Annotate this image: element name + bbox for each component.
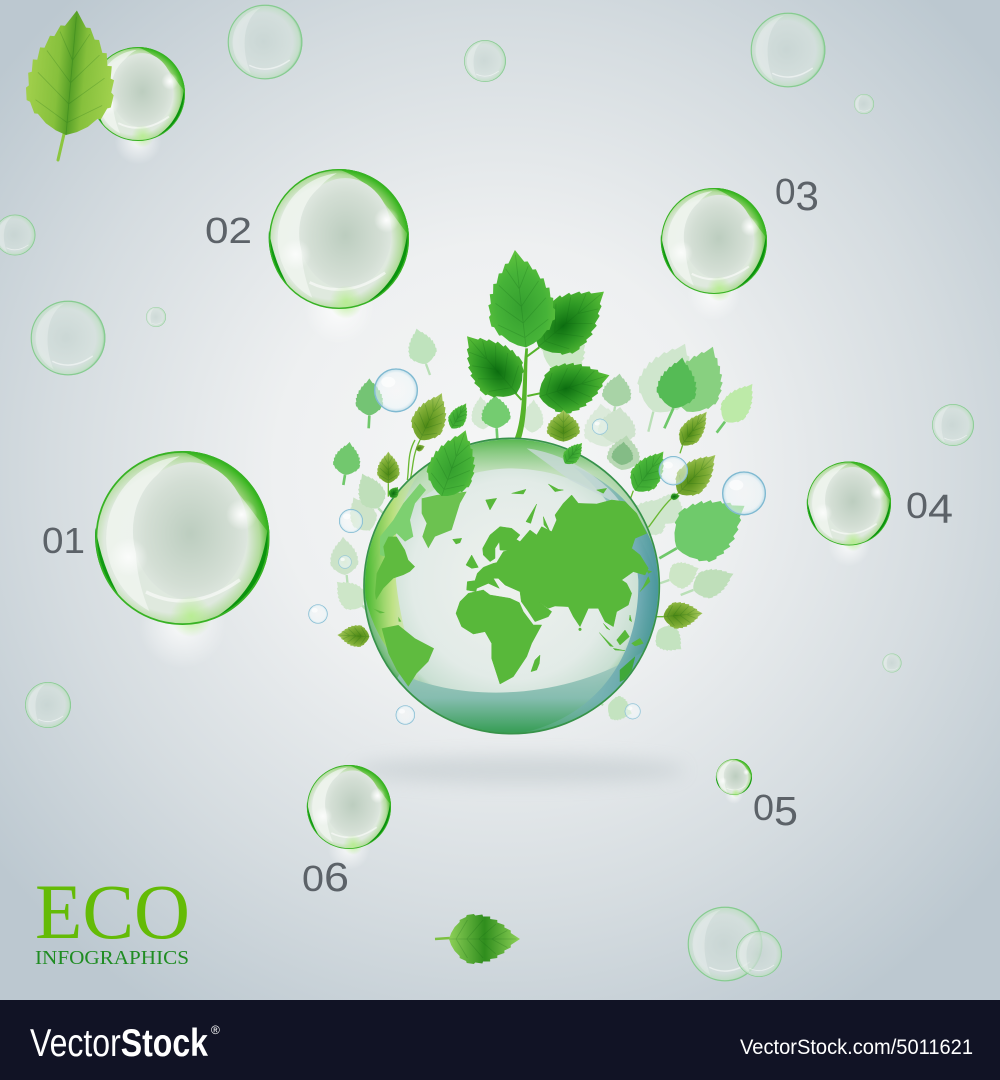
label 02: 02 [205, 210, 252, 251]
subtitle: INFOGRAPHICS: INFOGRAPHICS [35, 947, 189, 969]
glass globe [363, 438, 663, 737]
Madagascar [531, 655, 540, 672]
top-right light facet [527, 448, 619, 501]
Arctic Canada [380, 483, 426, 557]
North America [375, 537, 415, 600]
title: ECO: ECO [35, 868, 190, 955]
dark plant leaves [448, 246, 622, 442]
bubble 04 [807, 461, 891, 566]
bubble 01 [95, 451, 270, 668]
small water bubbles [308, 368, 766, 725]
top-left bubble [91, 47, 185, 164]
footer image id: VectorStock.com/5011621 [740, 1036, 973, 1059]
globe top crescent [388, 440, 652, 544]
bubble 03 [661, 188, 767, 320]
Arctic islands [486, 484, 607, 532]
label 03: 3 [796, 173, 819, 219]
footer registered mark: ® [211, 1023, 220, 1037]
globe ground shadow [355, 756, 685, 784]
plant stem [388, 347, 683, 617]
icon: top-left leaf [22, 7, 121, 160]
Australia edge [620, 657, 635, 682]
footer bar [0, 1000, 1000, 1080]
label 06: 06 [302, 854, 349, 900]
South America [382, 625, 434, 687]
footer brand logo: VectorStock [30, 1022, 208, 1065]
globe with plant, coordinates are in 3x units [308, 246, 766, 737]
Greenland [422, 492, 467, 548]
bubble 02 [269, 169, 409, 344]
pale leaves behind globe [327, 313, 739, 725]
Britain [466, 555, 478, 568]
label 04: 0 [906, 485, 926, 526]
western continents [373, 483, 467, 687]
label 03: 0 [775, 171, 795, 212]
bubble 06 [307, 765, 391, 870]
label 01: 01 [42, 520, 85, 561]
eco title [35, 868, 190, 969]
mid green flat leaves [331, 337, 764, 574]
Eurasia [467, 495, 648, 627]
bubble 05 [716, 759, 752, 804]
Iceland [453, 538, 462, 544]
Caribbean islands [373, 608, 401, 622]
globe left crescent [365, 472, 420, 680]
label 04: 4 [928, 486, 953, 532]
label 05: 5 [774, 788, 798, 834]
icon: bottom leaf [435, 914, 520, 964]
globe bottom crescent [398, 652, 643, 732]
foreground leaves [337, 386, 727, 648]
globe right crescent [520, 467, 660, 733]
Sri Lanka [579, 628, 581, 631]
Africa [456, 590, 542, 684]
number labels [42, 171, 953, 900]
Japan and Asian islands [599, 570, 652, 651]
eastern continents [453, 484, 652, 684]
label 05: 0 [753, 787, 773, 828]
